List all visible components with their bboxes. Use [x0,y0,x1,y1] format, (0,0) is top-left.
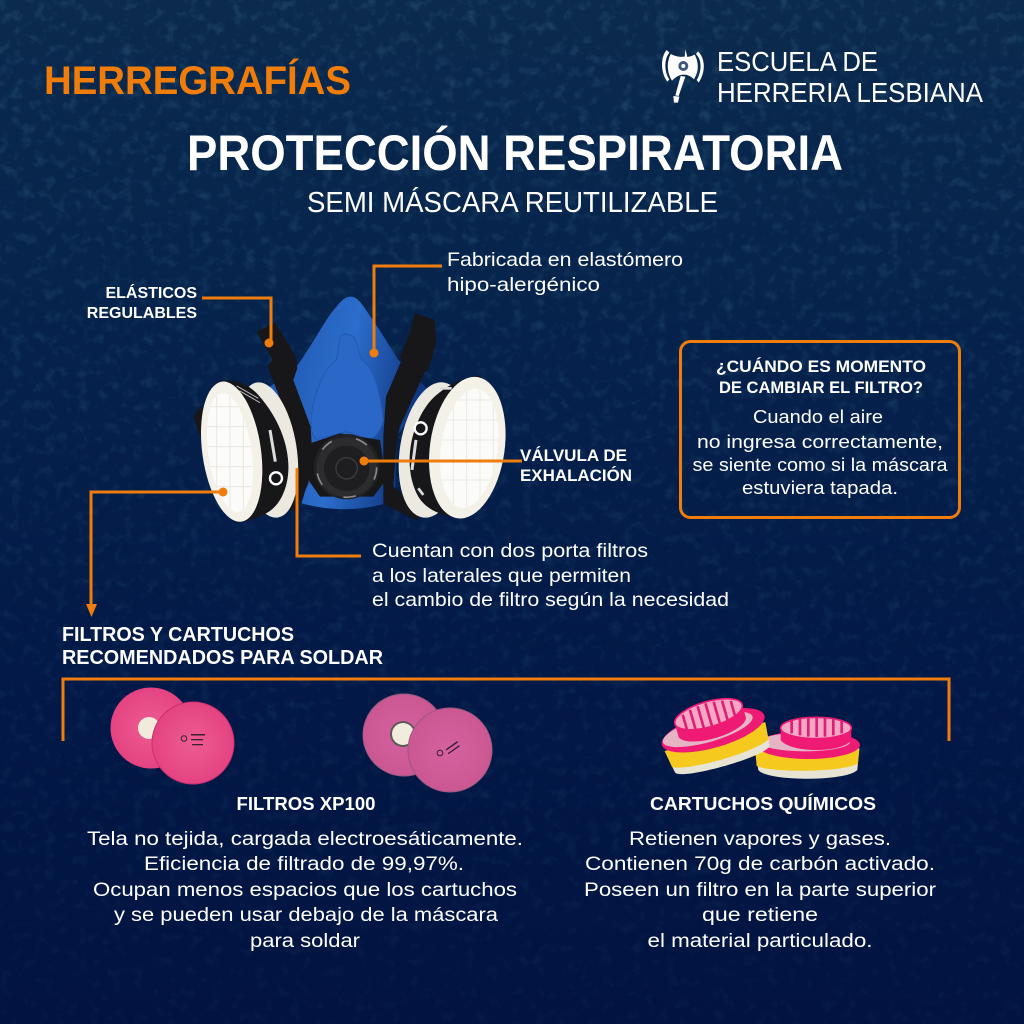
arrow: fabricada en elastómero [370,266,442,358]
bracket [63,679,949,741]
arrow: porta filtros [297,468,361,556]
valve frame [308,433,386,497]
left back strap [193,405,210,447]
icon: double axe [662,49,704,103]
heading: filtros y cartuchos: RECOMENDADOS PARA SOLDAR [62,647,384,669]
callout body: no ingresa correctamente, [697,431,943,452]
panel body: para soldar [250,931,361,952]
logo text [717,46,983,108]
panel body [584,829,937,952]
panel body: Eficiencia de filtrado de 99,97%. [144,854,464,875]
label: porta filtros: el cambio de filtro según la necesidad [372,589,729,611]
label: porta filtros: a los laterales que permiten [372,565,631,587]
logo text: ESCUELA DE [717,46,878,77]
panel body: el material particulado. [648,931,872,952]
heading: filtros y cartuchos [62,624,384,669]
callout heading: ¿CUÁNDO ES MOMENTO [716,357,926,376]
cartridge right [755,717,860,779]
callout heading [716,357,926,397]
image: filtros XP100 pink [110,688,234,784]
label: fabricada en elastómero: Fabricada en elastómero [447,249,683,271]
panel body: y se pueden usar debajo de la máscara [114,905,498,926]
callout heading: DE CAMBIAR EL FILTRO? [719,378,923,397]
subtitle: SEMI MÁSCARA REUTILIZABLE [307,186,718,219]
heading: filtros y cartuchos: FILTROS Y CARTUCHOS [62,624,294,646]
callout body: Cuando el aire [753,406,883,427]
label: elásticos regulables: ELÁSTICOS [105,283,197,302]
panel heading: FILTROS XP100 [236,793,376,814]
heading: Herregrafías: HERREGRAFÍAS [44,58,351,103]
callout body [692,406,948,498]
callout body: se siente como si la máscara [692,454,948,475]
left cartridge [201,380,298,523]
label: válvula de exhalación [520,446,632,485]
label: válvula de exhalación: VÁLVULA DE [520,446,627,465]
cartridge left [654,687,775,781]
callout lines: mask labels [86,266,522,617]
arrow: válvula de exhalación [360,456,522,466]
panel body: Retienen vapores y gases. [629,829,891,850]
arrow: elásticos regulables [202,298,274,348]
image: cartuchos químicos [654,687,860,781]
panel body: que retiene [702,905,818,926]
right strap [383,313,436,521]
logo: Escuela de Herreria Lesbiana [662,46,983,108]
label: elásticos regulables [87,283,197,322]
panel body: Tela no tejida, cargada electroesáticamente. [87,829,523,850]
nose ridge [311,334,383,439]
label: porta filtros [372,540,729,611]
logo text: HERRERIA LESBIANA [717,77,983,108]
panel heading: CARTUCHOS QUÍMICOS [650,793,876,814]
label: fabricada en elastómero [447,249,683,296]
image: half mask respirator [193,297,514,526]
panel body: Ocupan menos espacios que los cartuchos [93,880,517,901]
callout: cuándo cambiar el filtro [680,342,960,518]
callout body: estuviera tapada. [742,477,898,498]
panel: cartuchos químicos [584,793,937,952]
title: PROTECCIÓN RESPIRATORIA [187,125,843,181]
image: filtros XP100 mauve [363,694,492,792]
label: válvula de exhalación: EXHALACIÓN [520,466,632,485]
left strap [257,323,312,511]
band print [237,386,282,484]
label: elásticos regulables: REGULABLES [87,305,197,322]
panel body [87,829,523,952]
panel: filtros XP100 [87,793,523,952]
arrow: filtros [86,488,228,617]
blue mask body [270,297,427,509]
label: porta filtros: Cuentan con dos porta filtros [372,540,648,562]
label: fabricada en elastómero: hipo-alergénico [447,274,600,296]
panel body: Contienen 70g de carbón activado. [585,854,935,875]
right cartridge [398,375,506,518]
band print [412,388,452,495]
exhalation valve [314,434,379,499]
panel body: Poseen un filtro en la parte superior [584,880,937,901]
